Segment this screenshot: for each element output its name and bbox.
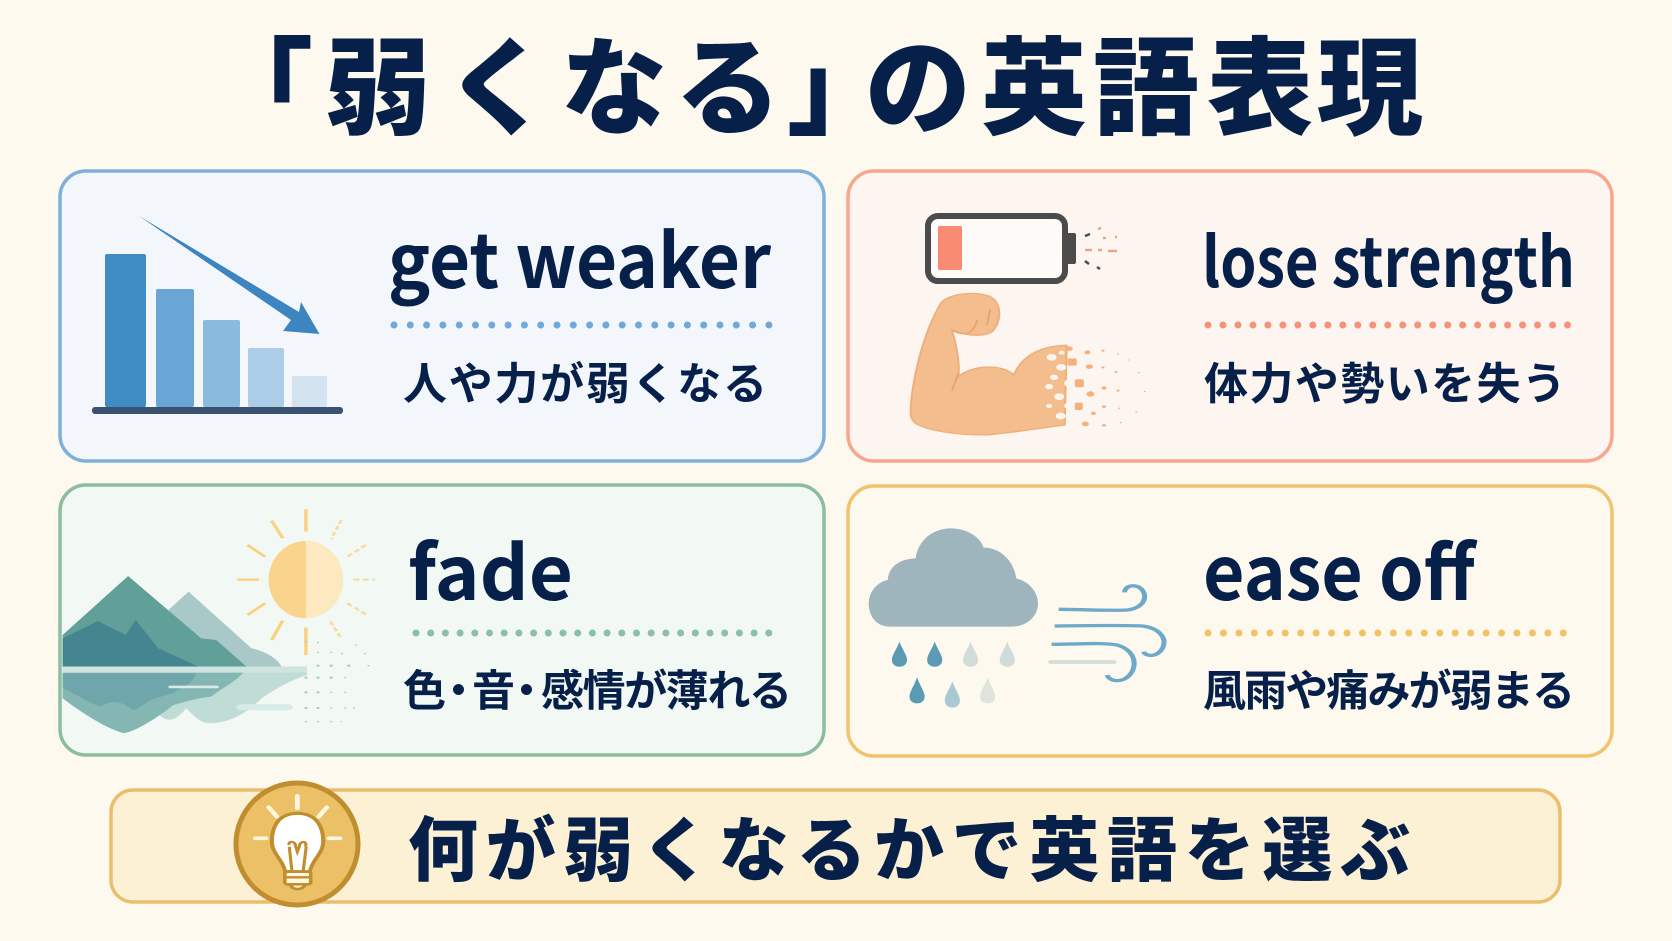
meaning: 体力や勢いを失う bbox=[1204, 348, 1566, 412]
icon: rain cloud and weakening wind bbox=[869, 528, 1164, 708]
panel: lose strength bbox=[848, 171, 1612, 461]
card background bbox=[848, 171, 1612, 461]
meaning: ・ bbox=[505, 657, 548, 719]
banner: takeaway bbox=[111, 783, 1560, 905]
meaning: 風雨や痛みが弱まる bbox=[1203, 657, 1575, 719]
meaning: ・ bbox=[437, 657, 480, 719]
icon: declining bar chart with arrow bbox=[92, 216, 343, 414]
card background bbox=[848, 486, 1612, 756]
icon: fading sun over mountains and lake bbox=[63, 576, 307, 733]
dotted divider bbox=[1208, 322, 1568, 328]
panel: get weaker bbox=[60, 171, 824, 461]
term: get weaker: get weaker bbox=[388, 201, 771, 310]
icon: light bulb badge bbox=[236, 783, 358, 905]
banner background bbox=[111, 790, 1560, 902]
meaning: 色 bbox=[403, 657, 446, 719]
card background bbox=[60, 171, 824, 461]
takeaway text: 何が弱くなるかで英語を選ぶ bbox=[408, 795, 1410, 896]
dotted divider bbox=[416, 630, 769, 636]
icon: low battery bbox=[928, 216, 1117, 281]
meaning: 感情が薄れる bbox=[541, 657, 792, 719]
meaning: 音 bbox=[472, 657, 515, 719]
dotted divider bbox=[1208, 630, 1564, 636]
term: lose strength: lose strength bbox=[1202, 207, 1575, 307]
title: 「弱くなる」の英語表現 bbox=[207, 3, 1423, 157]
panel: ease off bbox=[848, 486, 1612, 756]
term: fade: fade bbox=[408, 513, 573, 622]
dotted divider bbox=[394, 322, 769, 328]
meaning: 人や力が弱くなる bbox=[403, 348, 767, 412]
card background bbox=[60, 485, 824, 755]
panel: fade bbox=[60, 485, 824, 755]
icon: dissolving muscle arm bbox=[911, 293, 1146, 435]
term: ease off: ease off bbox=[1203, 513, 1478, 622]
